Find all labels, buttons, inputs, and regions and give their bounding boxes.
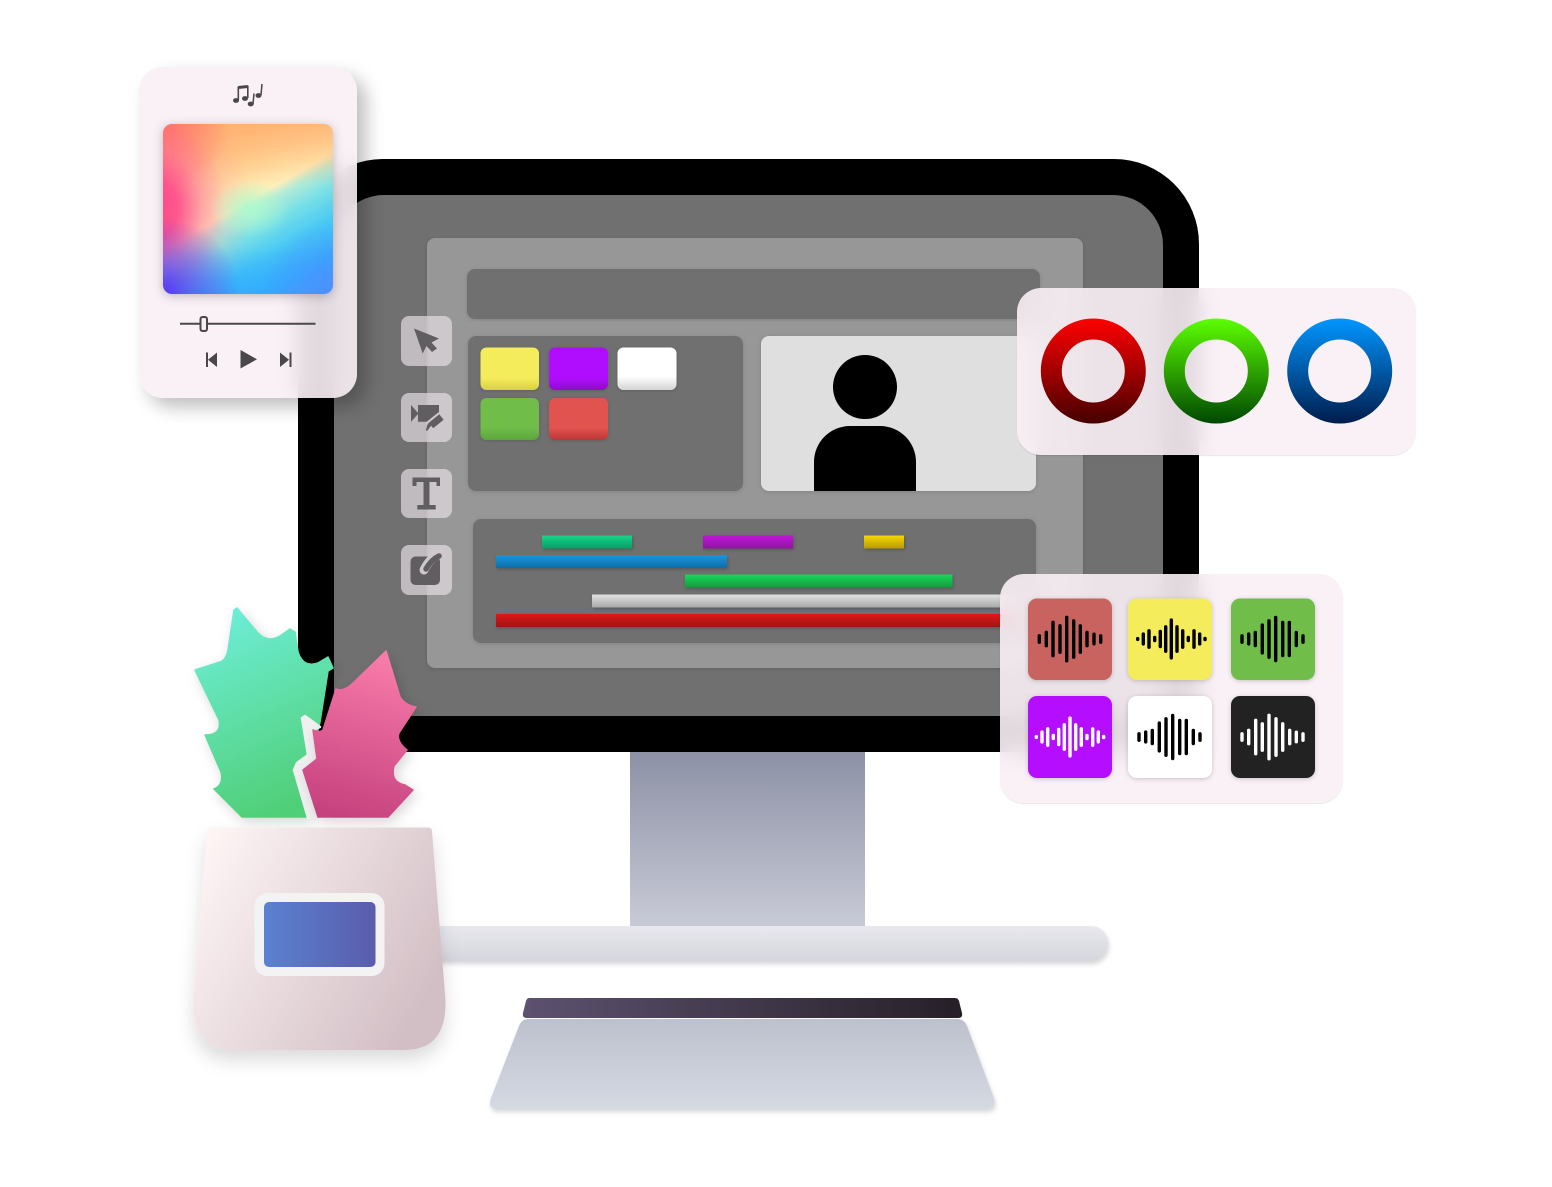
- monitor bezel: [298, 159, 1199, 752]
- purple audio tile: [1028, 696, 1112, 778]
- music notes icon: [233, 84, 263, 106]
- white swatch: [618, 348, 676, 390]
- album art gradient: [163, 124, 333, 294]
- red swatch: [549, 398, 608, 440]
- green audio tile: [1231, 598, 1315, 680]
- music player card: [139, 67, 357, 398]
- person head: [833, 355, 897, 419]
- flower pot: [193, 828, 446, 1050]
- red clip: [496, 614, 1022, 627]
- yellow swatch: [480, 348, 539, 390]
- red ring: [1051, 329, 1135, 413]
- video preview panel: [761, 336, 1036, 491]
- green clip: [542, 536, 632, 548]
- grey clip: [592, 594, 1022, 608]
- person body: [814, 426, 916, 491]
- white audio tile: [1128, 696, 1212, 778]
- tool button: text: [401, 469, 452, 518]
- keyboard: [490, 998, 995, 1109]
- purple clip: [703, 536, 793, 548]
- blue ring: [1298, 329, 1382, 413]
- tool button: pointer: [401, 316, 452, 366]
- tool button: video edit: [401, 393, 452, 442]
- audio clips card: [1000, 574, 1343, 803]
- pot label frame: [254, 893, 384, 976]
- pot label: [264, 902, 376, 967]
- monitor: [298, 159, 1199, 752]
- green ring: [1174, 329, 1258, 413]
- keyboard body: [490, 1019, 995, 1109]
- keyboard top strip: [523, 998, 962, 1018]
- tool button: notes: [401, 545, 452, 595]
- pink leaf: [303, 651, 416, 817]
- monitor screen: [334, 195, 1163, 716]
- purple swatch: [549, 348, 608, 390]
- white leaf outline: [294, 716, 320, 818]
- long green clip: [685, 574, 952, 588]
- pot body: [193, 828, 446, 1050]
- monitor stand neck: [630, 750, 865, 926]
- yellow clip: [864, 536, 904, 548]
- playback controls: [180, 316, 316, 368]
- media library panel: [468, 336, 743, 491]
- blue clip: [496, 555, 727, 568]
- yellow audio tile: [1128, 598, 1212, 680]
- black audio tile: [1231, 696, 1315, 778]
- plant: [195, 608, 416, 818]
- timeline panel: [473, 519, 1036, 643]
- application window: [427, 238, 1083, 668]
- color rings card: [1017, 288, 1416, 455]
- top toolbar: [467, 269, 1040, 319]
- monitor stand base: [400, 926, 1108, 961]
- red audio tile: [1028, 598, 1112, 680]
- green swatch: [480, 398, 539, 440]
- green leaf: [195, 608, 333, 817]
